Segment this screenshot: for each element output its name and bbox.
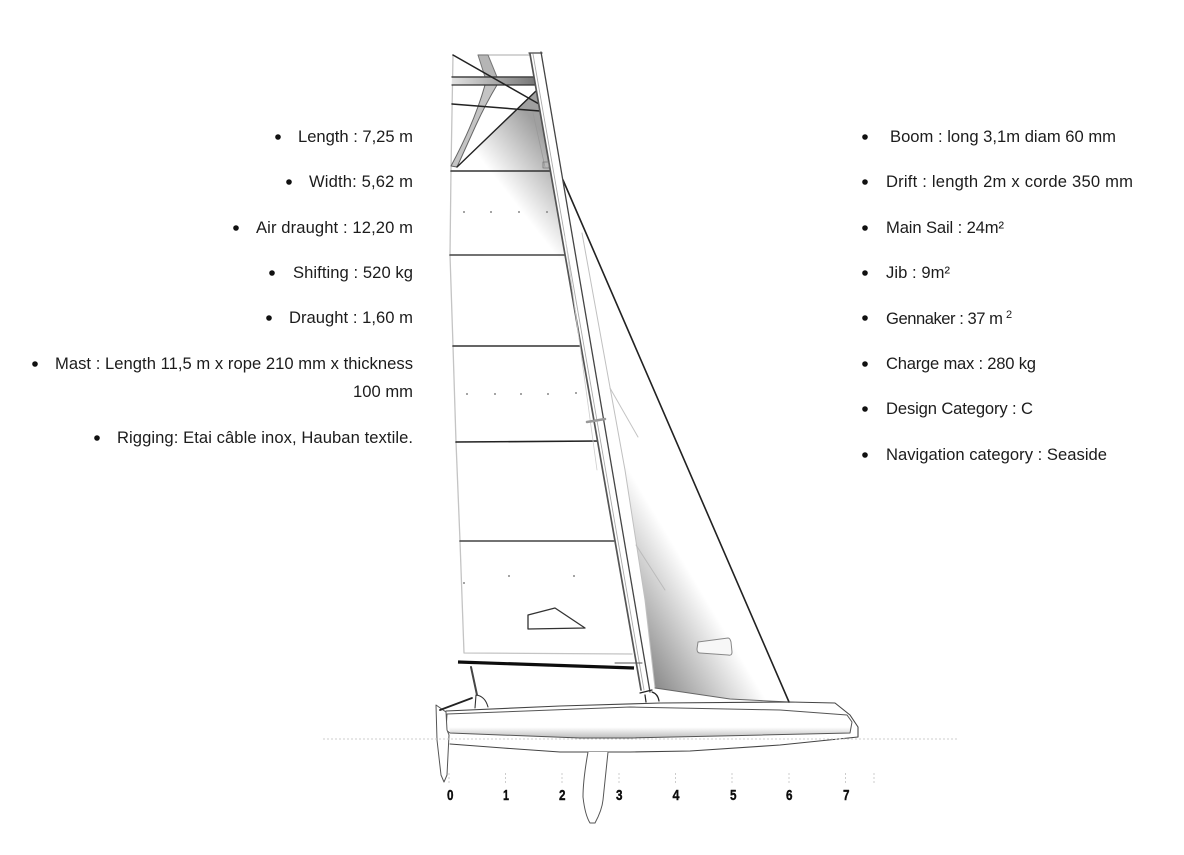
length scale: 3 <box>616 787 622 804</box>
spec: charge max: Charge max : 280 kg <box>886 354 1036 373</box>
spec: air draught: Air draught : 12,20 m <box>256 218 413 237</box>
spec: mast <box>32 354 413 401</box>
length scale: 0 <box>447 787 454 804</box>
waterline <box>323 738 957 740</box>
spec: jib: Jib : 9m² <box>886 263 950 282</box>
spec: gennaker: 2 <box>1006 309 1012 321</box>
spec: drift: Drift : length 2m x corde 350 mm <box>886 172 1133 191</box>
spec: gennaker: Gennaker : 37 m <box>886 309 1003 328</box>
jib window <box>697 638 732 655</box>
reef dots <box>463 211 577 584</box>
spec: mast: 100 mm <box>353 382 413 401</box>
mainsail <box>450 55 632 654</box>
boat side profile drawing <box>323 52 957 823</box>
right specification list <box>862 127 1133 464</box>
spec: mast: Mast : Length 11,5 m x rope 210 mm x thickness <box>55 354 413 373</box>
length scale: 4 <box>672 787 680 804</box>
length scale <box>447 773 874 804</box>
spec: rigging: Rigging: Etai câble inox, Hauban textile. <box>117 428 413 447</box>
spec: shifting: Shifting : 520 kg <box>293 263 413 282</box>
spec: draught: Draught : 1,60 m <box>289 308 413 327</box>
mainsail window <box>528 608 585 629</box>
length scale: 6 <box>786 787 792 804</box>
daggerboard <box>583 752 608 823</box>
hull <box>446 702 858 752</box>
mast <box>529 52 659 702</box>
spec: main sail: Main Sail : 24m² <box>886 218 1004 237</box>
length scale: 1 <box>503 787 509 804</box>
spec: boom: Boom : long 3,1m diam 60 mm <box>890 127 1116 146</box>
jib <box>563 180 789 702</box>
spec: length: Length : 7,25 m <box>298 127 413 146</box>
rudder and tiller <box>436 667 488 782</box>
spec: width: Width: 5,62 m <box>309 172 413 191</box>
boom <box>458 662 642 668</box>
left specification list <box>32 127 413 447</box>
spec: design category: Design Category : C <box>886 399 1033 418</box>
length scale: 2 <box>559 787 566 804</box>
length scale: 5 <box>730 787 736 804</box>
spec: navigation category: Navigation category : Seaside <box>886 445 1107 464</box>
length scale: 7 <box>843 787 850 804</box>
